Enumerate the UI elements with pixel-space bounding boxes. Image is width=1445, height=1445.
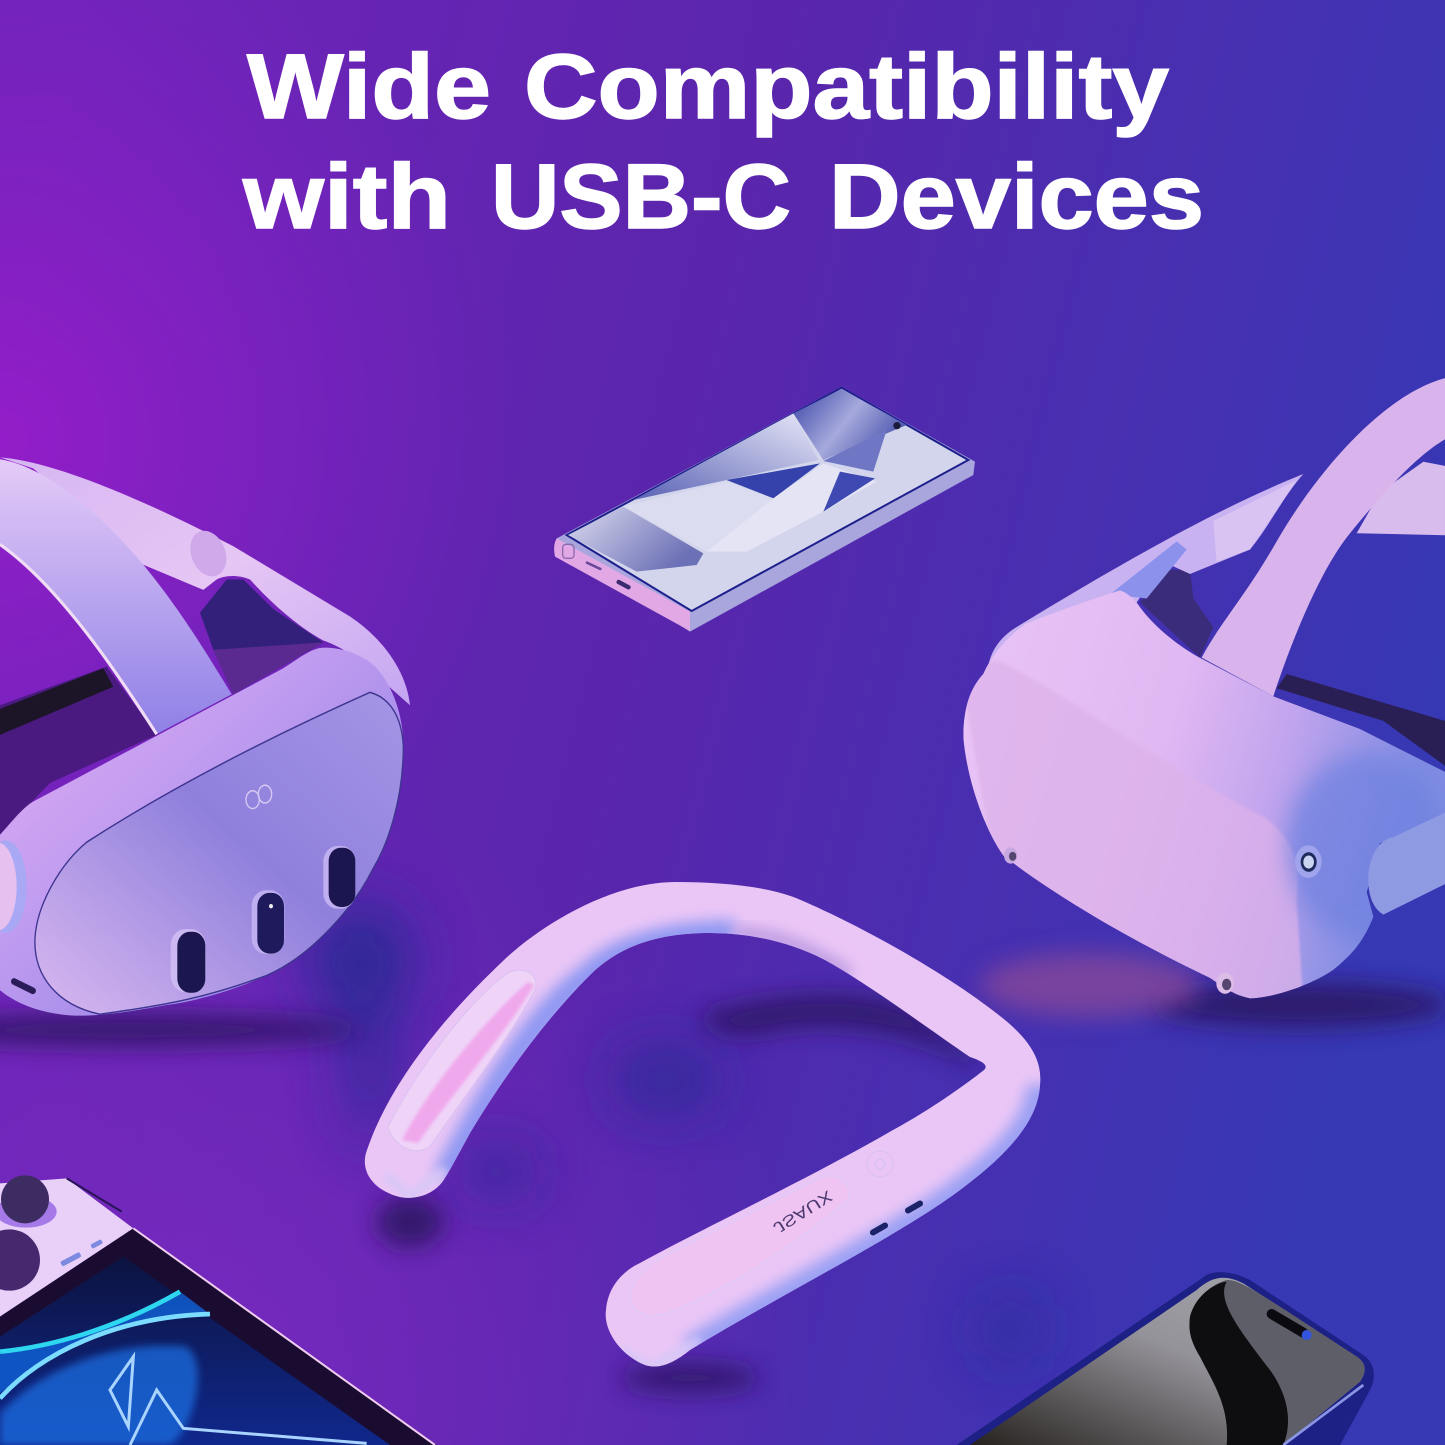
icon: cameras bbox=[171, 846, 355, 993]
phone: top centre bbox=[554, 387, 975, 632]
phone: bottom right bbox=[957, 1272, 1374, 1445]
device shadows bbox=[0, 900, 1445, 1392]
title: Wide bbox=[247, 36, 491, 138]
title: Compatibility bbox=[524, 36, 1169, 138]
front strap bbox=[0, 459, 232, 734]
side arm bbox=[1368, 813, 1445, 915]
icon: small buttons bbox=[60, 1239, 103, 1267]
console screen bbox=[0, 1257, 390, 1445]
speaker grille: left bbox=[388, 970, 536, 1151]
screen facets bbox=[568, 389, 907, 572]
icon: USB-C ports bbox=[869, 1199, 924, 1237]
icon: power button bbox=[867, 1151, 893, 1177]
text: brand logo: JSAUX bbox=[770, 1186, 835, 1236]
headset: left (Quest 3) bbox=[0, 457, 410, 1016]
title: USB-C bbox=[491, 146, 791, 248]
top strap bbox=[1202, 378, 1445, 696]
icon: joystick bbox=[0, 1175, 57, 1228]
title bbox=[242, 36, 1204, 248]
back strap bbox=[0, 457, 410, 705]
icon: sensors bbox=[1004, 845, 1322, 994]
side knob bbox=[0, 840, 27, 933]
front plate bbox=[35, 692, 403, 1014]
icon: logo bbox=[246, 785, 272, 809]
title: Devices bbox=[829, 146, 1204, 248]
neckband speaker bbox=[365, 882, 1040, 1368]
visor body bbox=[0, 648, 403, 1016]
handheld console bbox=[0, 1175, 437, 1445]
head band bbox=[988, 474, 1303, 666]
headset: right (Quest 2) bbox=[950, 378, 1445, 1006]
speaker grille: right with logo bbox=[631, 1176, 849, 1315]
icon: d-pad bbox=[0, 1229, 40, 1291]
power port bbox=[10, 977, 37, 995]
title: with bbox=[242, 146, 451, 248]
visor body bbox=[950, 574, 1445, 1006]
